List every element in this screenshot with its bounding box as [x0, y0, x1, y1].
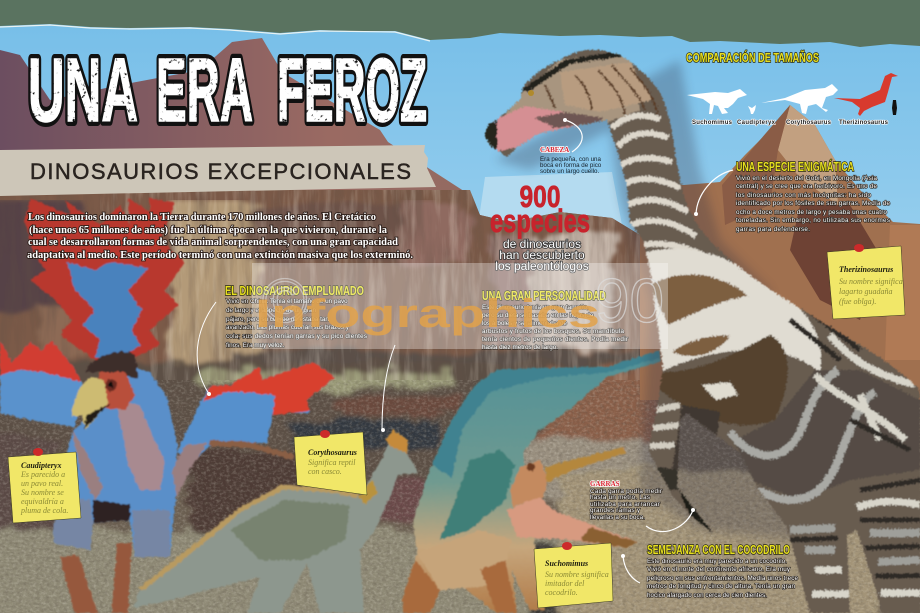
subtitle banner: DINOSAURIOS EXCEPCIONALES	[30, 159, 411, 184]
note: Caudipteryx: un pavo real.	[21, 479, 63, 488]
annotation: una gran personalidad: tenía cientos de pequeños dientes. Podía medir	[482, 336, 628, 343]
note: Caudipteryx: equivaldría a	[21, 497, 64, 506]
left wing	[0, 340, 82, 427]
head colour	[488, 54, 640, 143]
tail and body	[403, 350, 660, 613]
annotation: una especie enigmática: ocho a doce metros de largo y pesaba unas cuatro	[736, 209, 887, 216]
labels: Corythosaurus	[786, 120, 832, 126]
chest chevrons	[735, 370, 920, 500]
eye	[528, 90, 534, 96]
annotation: garras: Cada garra podía medir	[590, 488, 662, 495]
annotation: una gran personalidad: Este dinosaurio tenía un gran tamaño,	[482, 304, 589, 311]
note: Caudipteryx: Caudipteryx	[21, 461, 61, 470]
annotation: garras: utilizaba para arrancar	[590, 501, 660, 508]
annotation: una gran personalidad: pero su dieta se basaba en las hojas de	[482, 312, 594, 319]
text: FEROZ	[277, 41, 427, 141]
note: Suchomimus: cocodrilo.	[545, 588, 578, 597]
watermark: Infographics	[255, 292, 600, 336]
silhouette: human	[892, 100, 897, 115]
annotation: semejanza con el cocodrilo: Este dinosaurio era muy parecido a un cocodrilo.	[647, 558, 787, 565]
top green torn band	[0, 0, 920, 47]
intro text	[27, 212, 413, 261]
watermark: 90	[595, 267, 664, 336]
note: Suchomimus: imitador del	[545, 579, 585, 588]
heading: COMPARACIÓN DE TAMAÑOS	[686, 50, 819, 65]
dinosaur: Caudipteryx	[0, 198, 335, 613]
stat: 900 especies: han descubierto	[499, 248, 585, 262]
stat: 900 especies: 900	[520, 179, 560, 214]
annotation: el dinosaurio emplumado: de largo y el aspecto de un gran	[226, 307, 316, 314]
annotation: el dinosaurio emplumado	[225, 283, 367, 349]
annotation: una especie enigmática: UNA ESPECIE ENIGMÁTICA	[736, 159, 854, 174]
annotation: una especie enigmática: toneladas. Sin embargo, no utilizaba sus enormes	[736, 217, 890, 224]
title: UNA	[28, 41, 138, 141]
annotation: semejanza con el cocodrilo: SEMEJANZA CON EL COCODRILO	[647, 542, 790, 557]
title: UNA	[28, 41, 138, 141]
tail strap	[210, 443, 293, 457]
shoulder bands	[636, 249, 821, 372]
silhouette: Corythosaurus	[761, 84, 838, 114]
note: Therizinosaurus: Su nombre significa	[839, 277, 903, 286]
annotation: el dinosaurio emplumado: pájaro, pero su cuerpo no estaba tan	[226, 316, 329, 323]
labels: Caudipteryx	[737, 120, 776, 126]
annotation: una gran personalidad: hasta diez metros de largo.	[482, 344, 558, 351]
head and upper jaw	[510, 447, 625, 507]
annotation: cabeza: sobre un largo cuello.	[540, 168, 599, 175]
silhouette: Suchomimus	[687, 89, 747, 114]
labels	[692, 120, 889, 126]
stat: 900 especies: especies	[490, 203, 590, 239]
arm	[650, 405, 680, 446]
annotation: cabeza	[540, 146, 602, 175]
title	[28, 41, 427, 141]
annotation: semejanza con el cocodrilo	[647, 542, 798, 599]
note: Corythosaurus	[294, 430, 367, 495]
note: Caudipteryx: Es parecido a	[20, 470, 65, 479]
annotation: el dinosaurio emplumado: avanzado. Las plumas cubrían sus brazos y	[226, 324, 350, 331]
annotation: cabeza: CABEZA	[540, 146, 569, 154]
dinosaur: Corythosaurus	[133, 430, 418, 613]
intro text: Los dinosaurios dominaron la Tierra durante 170 millones de años. El Cretácico	[28, 212, 376, 223]
labels: Therizinosaurus	[839, 120, 889, 126]
neck stripes	[612, 116, 708, 258]
dinosaur: Suchomimus	[403, 350, 660, 613]
legs	[60, 543, 132, 613]
dinosaur: Therizinosaurus	[484, 48, 920, 613]
labels: Suchomimus	[692, 120, 733, 126]
neck	[115, 400, 165, 490]
subtitle banner	[0, 145, 436, 196]
body	[53, 367, 177, 557]
annotation: garras: llevarlas a su boca.	[590, 514, 645, 521]
size comparison	[686, 50, 898, 126]
arrow: personalidad	[381, 345, 395, 432]
stat: 900 especies: de dinosaurios	[503, 237, 581, 251]
annotation: semejanza con el cocodrilo: hocico alargado con cerca de cien dientes.	[647, 592, 767, 599]
arrow: garras	[646, 508, 695, 532]
right mountain peak	[640, 105, 920, 400]
note: Suchomimus	[534, 542, 613, 608]
annotation: una gran personalidad: los árboles y se alimentaba de	[482, 320, 568, 327]
annotation: una especie enigmática	[736, 159, 890, 233]
arrow: cabeza	[563, 118, 582, 152]
annotation: garras	[590, 480, 662, 521]
watermark: ©	[262, 267, 308, 336]
silhouette: Caudipteryx	[748, 105, 756, 114]
arrow: enigmática	[694, 170, 733, 216]
note: Corythosaurus: Significa reptil	[308, 458, 356, 467]
annotation: cabeza: boca en forma de pico	[540, 162, 602, 169]
stat: 900 especies: los paleontólogos	[495, 259, 589, 273]
title: ERA	[156, 41, 253, 141]
annotation: una especie enigmática: identificado por los fósiles de sus garras. Medía de	[736, 200, 890, 207]
note: Suchomimus: Suchomimus	[545, 559, 588, 568]
silhouette: Therizinosaurus	[834, 73, 898, 116]
annotation: el dinosaurio emplumado: EL DINOSAURIO EMPLUMADO	[225, 283, 364, 298]
intro text: (hace unos 65 millones de años) fue la última época en la que vivieron, durante la	[29, 225, 388, 236]
note: Caudipteryx: Su nombre se	[21, 488, 64, 497]
annotation: semejanza con el cocodrilo: Vivió en el norte del continente africano. Era muy	[647, 566, 791, 573]
annotation: el dinosaurio emplumado: finos. Era muy veloz.	[226, 342, 285, 349]
annotation: semejanza con el cocodrilo: peligroso en sus enfrentamientos. Medía unos trece	[647, 575, 798, 582]
arrow: emplumado	[197, 302, 216, 396]
stat: 900 especies	[490, 179, 590, 273]
note: Therizinosaurus: (fue oblga).	[839, 297, 876, 306]
annotation: una gran personalidad: UNA GRAN PERSONALIDAD	[482, 288, 606, 303]
note: Suchomimus: Su nombre significa	[545, 570, 609, 579]
note: Therizinosaurus: Therizinosaurus	[839, 265, 893, 274]
annotation: una gran personalidad	[482, 288, 628, 351]
title: ERA	[156, 41, 253, 141]
note: Corythosaurus: con casco.	[308, 467, 342, 476]
annotation: garras: grandes ramas y	[590, 507, 641, 514]
note: Corythosaurus: Corythosaurus	[308, 448, 357, 457]
intro text: adaptativa al medio. Este período terminó con una extinción masiva que los exterminó.	[27, 250, 413, 261]
annotation: el dinosaurio emplumado: Vivió en China. Tenía el tamaño de un pavo	[226, 298, 348, 305]
note: Therizinosaurus: lagarto guadaña	[839, 287, 893, 296]
soft shadow	[495, 60, 800, 540]
note: Caudipteryx: pluma de cola.	[20, 506, 68, 515]
annotation: una especie enigmática: los dinosaurios con más incógnitas: ha sido	[736, 192, 871, 199]
text: FEROZ	[277, 41, 427, 141]
annotation: una especie enigmática: central) y se cree que era herbívoro. Es uno de	[736, 183, 877, 190]
annotation: una especie enigmática: garras para defenderse.	[736, 226, 810, 233]
arrow: semejanza	[621, 554, 640, 583]
annotation: una especie enigmática: Vivió en el desierto del Gobi, en Mongolia (Asia	[736, 175, 877, 182]
intro text: cual se desarrollaron formas de vida animal sorprendentes, con una gran capacidad	[28, 237, 398, 248]
tail fan	[25, 198, 185, 362]
lower jaw	[507, 497, 637, 548]
note: Caudipteryx	[8, 448, 81, 523]
head	[72, 351, 138, 430]
annotation: una gran personalidad: arbustos y frutos de los bosques. Su mandíbula	[482, 328, 624, 335]
right wing	[177, 362, 335, 460]
note: Therizinosaurus	[827, 244, 905, 319]
watermark	[252, 263, 668, 349]
annotation: semejanza con el cocodrilo: metros de longitud y cinco de altura. Tenía un gran	[647, 583, 795, 590]
annotation: cabeza: Era pequeña, con una	[540, 156, 601, 163]
annotation: el dinosaurio emplumado: cola; sus dedos tenían garras y su pico dientes	[226, 333, 367, 340]
annotation: garras: hasta un metro. Las	[590, 494, 650, 501]
annotation: garras: GARRAS	[590, 480, 620, 488]
